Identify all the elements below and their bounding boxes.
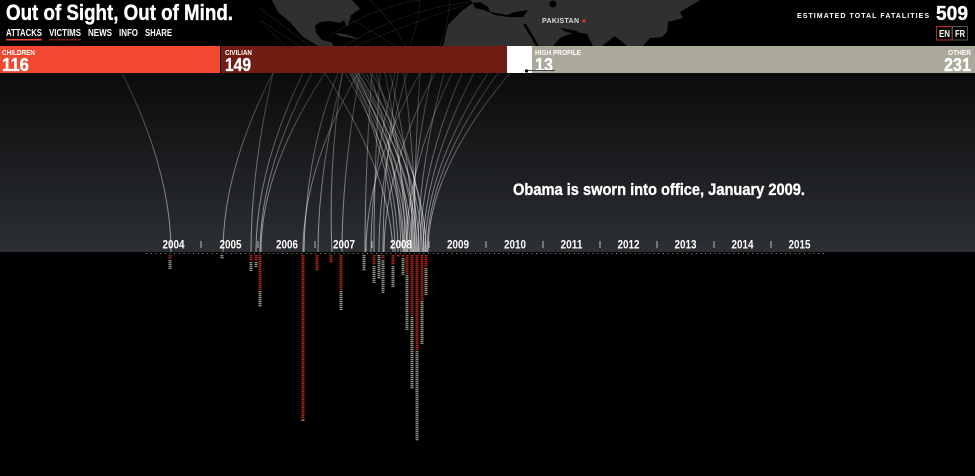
timeline year labels: 2008 (390, 238, 412, 252)
timeline year ticks (201, 241, 771, 248)
bar: civilian: CIVILIAN (225, 48, 252, 57)
casualty columns: civilian and children (red stripes) (170, 255, 426, 420)
bar: other: OTHER (948, 48, 972, 57)
title: Out of Sight, Out of Mind. (6, 0, 233, 25)
bar: children: CHILDREN (2, 48, 35, 57)
arcs from strikes up to the category bars (122, 73, 510, 252)
estimated total fatalities: 509 (936, 3, 968, 25)
navigation menu (6, 27, 172, 40)
Pakistan map marker: PAKISTAN (542, 18, 579, 25)
timeline year labels: 2005 (220, 238, 242, 252)
navigation menu: SHARE (145, 27, 172, 39)
background: gradient sky panel (0, 73, 975, 252)
casualty columns: other (grey stripes) (170, 255, 426, 441)
timeline year labels: 2006 (276, 238, 298, 252)
bar: other (582, 46, 975, 75)
timeline year labels: 2014 (732, 238, 754, 252)
timeline year labels: 2013 (674, 238, 697, 252)
timeline year labels: 2004 (162, 238, 185, 252)
bar: children: 116 (2, 55, 29, 75)
navigation menu: ATTACKS (6, 27, 42, 39)
category bars (0, 46, 975, 75)
navigation menu: NEWS (88, 27, 112, 39)
faint arcs over the map (260, 0, 470, 46)
bar: other: 231 (944, 55, 971, 75)
timeline year labels: 2009 (447, 238, 469, 252)
navigation menu: INFO (119, 27, 138, 39)
estimated total fatalities: ESTIMATED TOTAL FATALITIES (797, 13, 929, 20)
timeline year labels: 2007 (333, 238, 355, 252)
timeline dotted axis (146, 252, 826, 254)
casualty columns underlay: solid dim red (170, 255, 426, 420)
bar: high profile: 13 (535, 55, 553, 75)
language switch: FR (955, 29, 966, 40)
casualty columns underlay: solid dim grey (170, 255, 426, 441)
timeline year labels (162, 238, 811, 252)
bar: high profile (507, 46, 582, 75)
language switch: EN (939, 29, 950, 40)
bar: children (0, 46, 220, 75)
estimated total fatalities (797, 3, 968, 25)
timeline year labels: 2012 (618, 238, 640, 252)
language switch (936, 26, 968, 40)
timeline year labels: 2010 (504, 238, 526, 252)
timeline year labels: 2011 (560, 238, 583, 252)
bar: high profile: HIGH PROFILE (535, 48, 581, 57)
timeline year labels: 2015 (788, 238, 811, 252)
callout: Obama is sworn into office, January 2009. (513, 180, 805, 199)
bar: civilian (221, 46, 507, 75)
world map (272, 0, 700, 46)
navigation menu: VICTIMS (49, 27, 81, 39)
bar: civilian: 149 (225, 55, 251, 75)
